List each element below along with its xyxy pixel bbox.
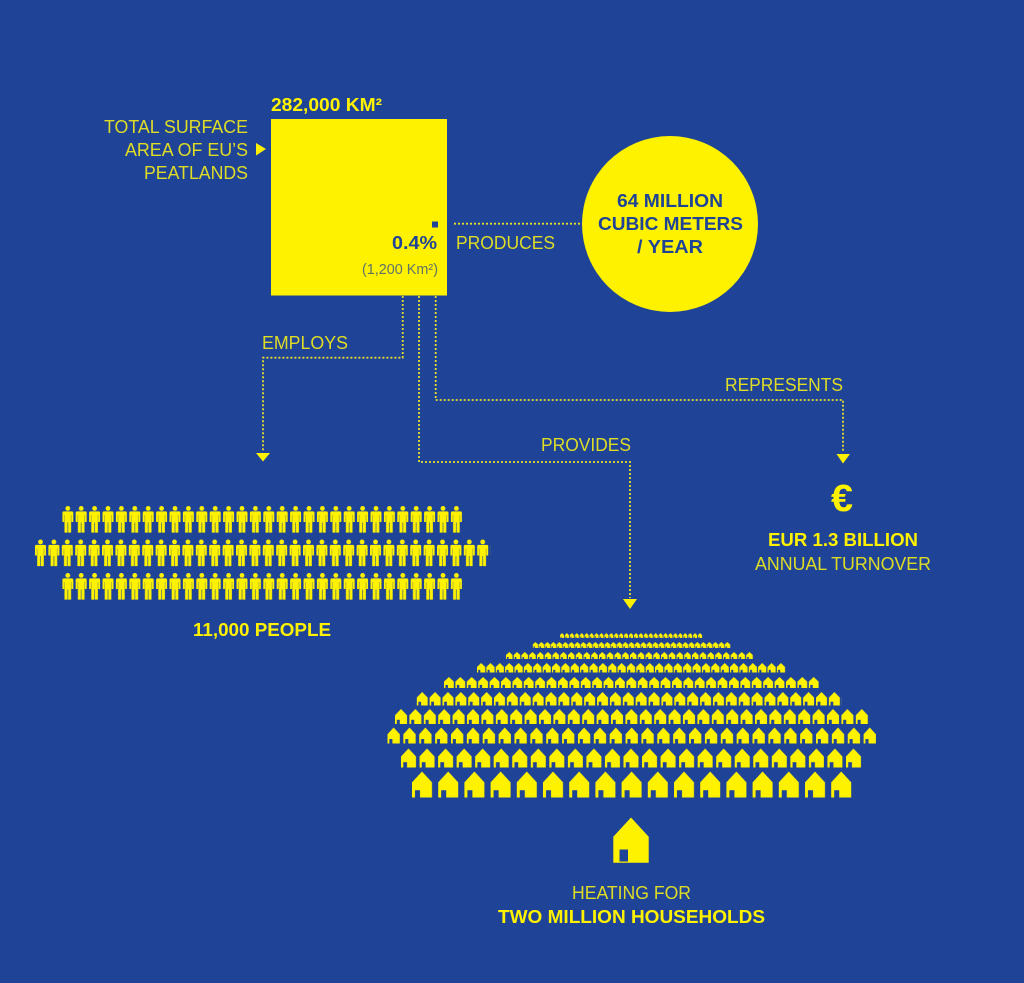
icon: euro sign: € — [831, 478, 853, 520]
panel: production circle: CUBIC METERS — [598, 213, 743, 234]
arrow: dotted line to circle — [454, 223, 583, 225]
arrow: pointing to square — [256, 143, 266, 156]
icon: large house — [613, 818, 649, 863]
chart: people pictogram — [35, 506, 491, 600]
text block: total surface area label: PEATLANDS — [144, 163, 248, 183]
panel: production circle — [582, 136, 758, 312]
arrow: represents connector — [436, 296, 850, 464]
text block: heating for two million households: HEATING FOR — [572, 883, 691, 903]
heading: total surface value: 282,000 KM² — [271, 95, 382, 115]
panel: production circle: 64 MILLION — [617, 190, 723, 211]
panel: production circle: / YEAR — [637, 236, 703, 257]
text: 11,000 people: 11,000 PEOPLE — [193, 620, 331, 640]
chart: houses pictogram — [388, 633, 878, 798]
text: 0.4 percent: 0.4% — [392, 233, 437, 253]
label: represents: REPRESENTS — [725, 375, 843, 395]
text: 1,200 square km: (1,200 Km²) — [362, 262, 438, 278]
text block: total surface area label: AREA OF EU’S — [125, 140, 248, 160]
text block: annual turnover — [755, 530, 931, 574]
text block: annual turnover: EUR 1.3 BILLION — [768, 530, 918, 550]
text block: heating for two million households — [498, 883, 765, 927]
text block: annual turnover: ANNUAL TURNOVER — [755, 554, 931, 574]
arrow: employs connector — [256, 296, 403, 462]
icon: small 0.4% square — [432, 222, 438, 228]
label: provides: PROVIDES — [541, 435, 631, 455]
panel: peatlands square — [271, 119, 447, 296]
text block: total surface area label — [104, 117, 248, 183]
text block: heating for two million households: TWO MILLION HOUSEHOLDS — [498, 907, 765, 927]
label: employs: EMPLOYS — [262, 333, 348, 353]
arrow: provides connector — [419, 296, 637, 609]
text block: total surface area label: TOTAL SURFACE — [104, 117, 248, 137]
label: produces: PRODUCES — [456, 233, 555, 253]
